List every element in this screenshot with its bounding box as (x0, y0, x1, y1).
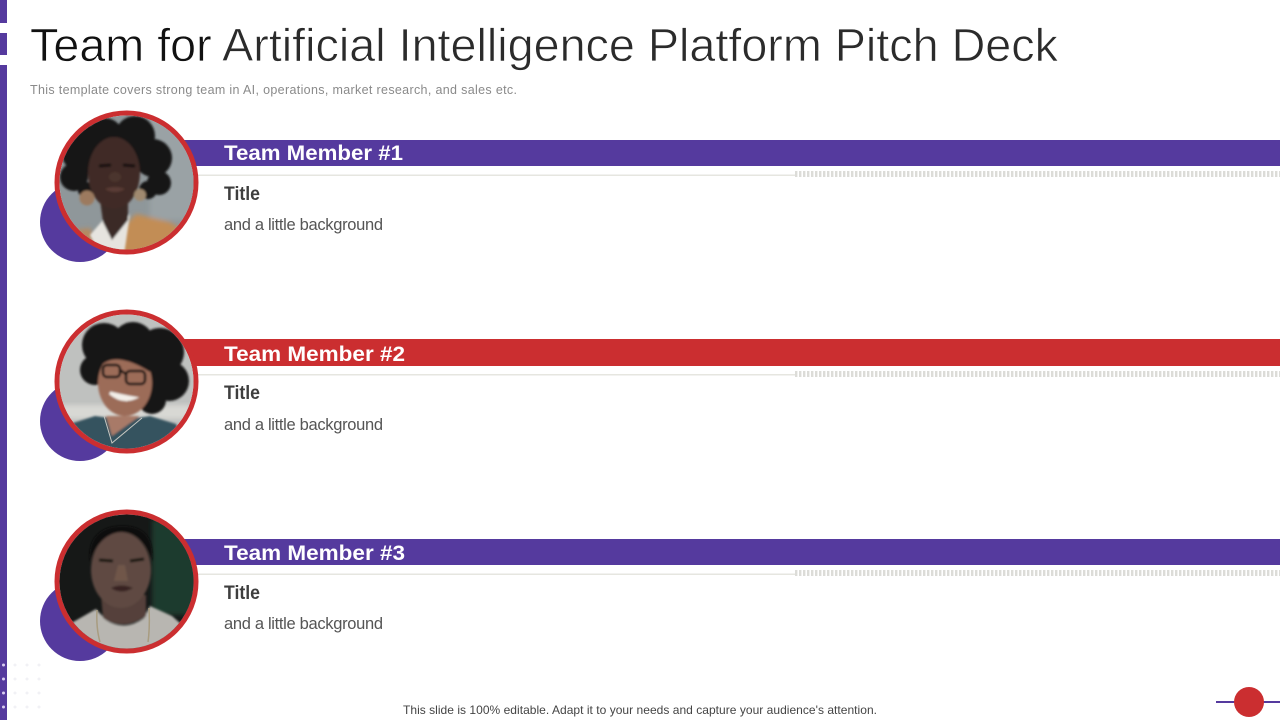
name: member 2: Team Member #2 (224, 343, 405, 366)
header bar: member 1 (170, 140, 1280, 166)
title: Team for Artificial Intelligence Platform Pitch Deck (30, 19, 1059, 71)
background: member 2: and a little background (224, 416, 383, 434)
accent circle: member 1 (40, 182, 120, 262)
accent circle: member 3 (40, 581, 120, 661)
role: member 1: Title (224, 184, 260, 205)
divider: member 2 (190, 371, 1280, 377)
panel: team member 3 (40, 510, 1280, 661)
role: member 3: Title (224, 583, 260, 604)
decorative dot grid (2, 664, 40, 708)
subtitle: This template covers strong team in AI, operations, market research, and sales etc. (30, 83, 517, 97)
panel: team member 2 (40, 310, 1280, 461)
portrait: member 3 (55, 510, 200, 655)
name: member 1: Team Member #1 (224, 142, 403, 165)
header bar: member 2 (170, 339, 1280, 366)
background: member 3: and a little background (224, 615, 383, 633)
left edge bar (0, 0, 7, 720)
role: member 2: Title (224, 383, 260, 404)
divider: member 3 (190, 570, 1280, 576)
name: member 3: Team Member #3 (224, 542, 405, 565)
portrait: member 2 (55, 310, 200, 455)
page marker (1216, 687, 1280, 717)
accent circle: member 2 (40, 381, 120, 461)
portrait: member 1 (55, 110, 200, 255)
divider: member 1 (190, 171, 1280, 177)
panel: team member 1 (40, 110, 1280, 262)
header bar: member 3 (170, 539, 1280, 565)
background: member 1: and a little background (224, 216, 383, 234)
footer note: This slide is 100% editable. Adapt it to your needs and capture your audience's attention. (403, 703, 877, 717)
